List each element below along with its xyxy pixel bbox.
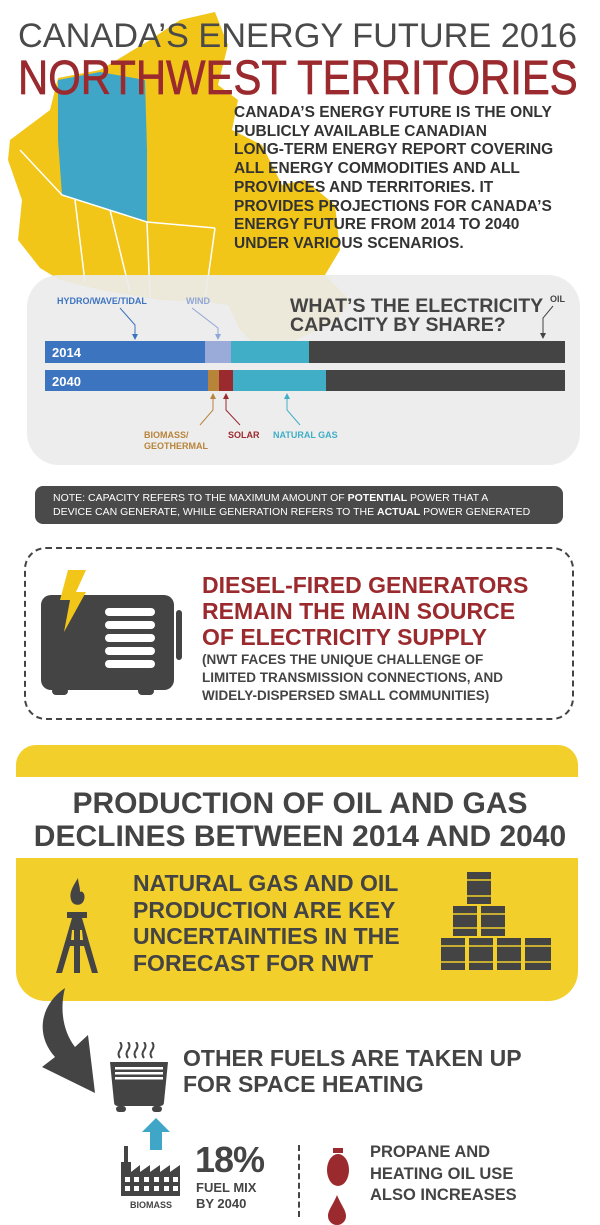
bar chart: HYDRO/WAVE/TIDAL — [57, 296, 147, 306]
propane text: PROPANE AND — [370, 1143, 490, 1161]
bar chart: GEOTHERMAL — [144, 441, 208, 451]
heading: capacity: CAPACITY BY SHARE? — [290, 314, 506, 336]
arrow: curved — [42, 988, 95, 1093]
icon: biomass factory — [121, 1146, 180, 1196]
bar chart: 2040 — [52, 374, 81, 389]
heading: production declines: DECLINES BETWEEN 2014 AND 2040 — [34, 820, 566, 853]
intro text: CANADA’S ENERGY FUTURE IS THE ONLY — [234, 104, 552, 121]
stat caption: FUEL MIX — [196, 1180, 256, 1195]
note box: NOTE: CAPACITY REFERS TO THE MAXIMUM AMOUNT OF POTENTIAL POWER THAT A — [53, 492, 488, 504]
intro text: ALL ENERGY COMMODITIES AND ALL — [234, 160, 520, 177]
heating heading — [183, 1045, 522, 1097]
diesel subtext: (NWT FACES THE UNIQUE CHALLENGE OF — [202, 652, 483, 667]
intro text — [234, 104, 553, 252]
stat caption: BY 2040 — [196, 1196, 246, 1211]
diesel subtext: WIDELY-DISPERSED SMALL COMMUNITIES) — [202, 688, 489, 703]
bar chart: OIL — [550, 294, 566, 304]
note box: DEVICE CAN GENERATE, WHILE GENERATION REFERS TO THE ACTUAL POWER GENERATED — [53, 506, 530, 518]
bar chart: WIND — [186, 296, 210, 306]
stat caption — [196, 1180, 256, 1211]
diesel heading: OF ELECTRICITY SUPPLY — [202, 624, 487, 650]
note box — [35, 486, 563, 524]
uncertainties text — [133, 870, 400, 976]
panel: electricity capacity — [27, 275, 580, 465]
heading: capacity — [290, 295, 543, 336]
diesel heading: DIESEL-FIRED GENERATORS — [202, 572, 528, 598]
icon: oil drop — [328, 1195, 346, 1225]
intro text: PROVIDES PROJECTIONS FOR CANADA’S — [234, 198, 552, 215]
biomass label: BIOMASS — [130, 1200, 172, 1210]
diesel subtext: LIMITED TRANSMISSION CONNECTIONS, AND — [202, 670, 503, 685]
panel: uncertainties — [16, 858, 578, 1001]
intro text: PUBLICLY AVAILABLE CANADIAN — [234, 123, 487, 140]
yellow band top — [16, 745, 578, 777]
intro text: PROVINCES AND TERRITORIES. IT — [234, 179, 493, 196]
diesel heading — [202, 572, 528, 650]
icon: generator — [41, 570, 182, 695]
icon: up arrow — [142, 1118, 170, 1150]
intro text: ENERGY FUTURE FROM 2014 TO 2040 — [234, 216, 519, 233]
icon: barrels — [441, 872, 551, 970]
bar chart: SOLAR — [228, 430, 260, 440]
heading: production declines: PRODUCTION OF OIL AND GAS — [72, 787, 528, 820]
icon: propane tank — [327, 1148, 349, 1186]
map of Canada — [8, 12, 349, 341]
subtitle: NORTHWEST TERRITORIES — [18, 52, 578, 105]
intro text: LONG-TERM ENERGY REPORT COVERING — [234, 141, 553, 158]
bar chart: BIOMASS/ — [144, 430, 189, 440]
diesel subtext — [202, 652, 503, 703]
propane text — [370, 1143, 517, 1204]
intro text: UNDER VARIOUS SCENARIOS. — [234, 235, 464, 252]
icon: heater — [110, 1042, 168, 1112]
bar chart — [45, 294, 566, 451]
heading: capacity: WHAT’S THE ELECTRICITY — [290, 295, 543, 317]
uncertainties text: NATURAL GAS AND OIL — [133, 870, 398, 896]
uncertainties text: FORECAST FOR NWT — [133, 950, 373, 976]
heating heading: OTHER FUELS ARE TAKEN UP — [183, 1045, 522, 1071]
heating heading: FOR SPACE HEATING — [183, 1071, 424, 1097]
title: CANADA’S ENERGY FUTURE 2016 — [18, 17, 577, 55]
diesel heading: REMAIN THE MAIN SOURCE — [202, 598, 515, 624]
uncertainties text: UNCERTAINTIES IN THE — [133, 923, 400, 949]
propane text: ALSO INCREASES — [370, 1186, 517, 1204]
bar chart: 2014 — [52, 345, 82, 360]
stat: 18%: 18% — [195, 1139, 264, 1180]
uncertainties text: PRODUCTION ARE KEY — [133, 896, 395, 922]
propane text: HEATING OIL USE — [370, 1164, 513, 1182]
icon: gas well — [56, 878, 98, 973]
bar chart: NATURAL GAS — [273, 430, 338, 440]
panel: diesel generators — [24, 547, 574, 720]
heading: production declines — [34, 787, 566, 853]
